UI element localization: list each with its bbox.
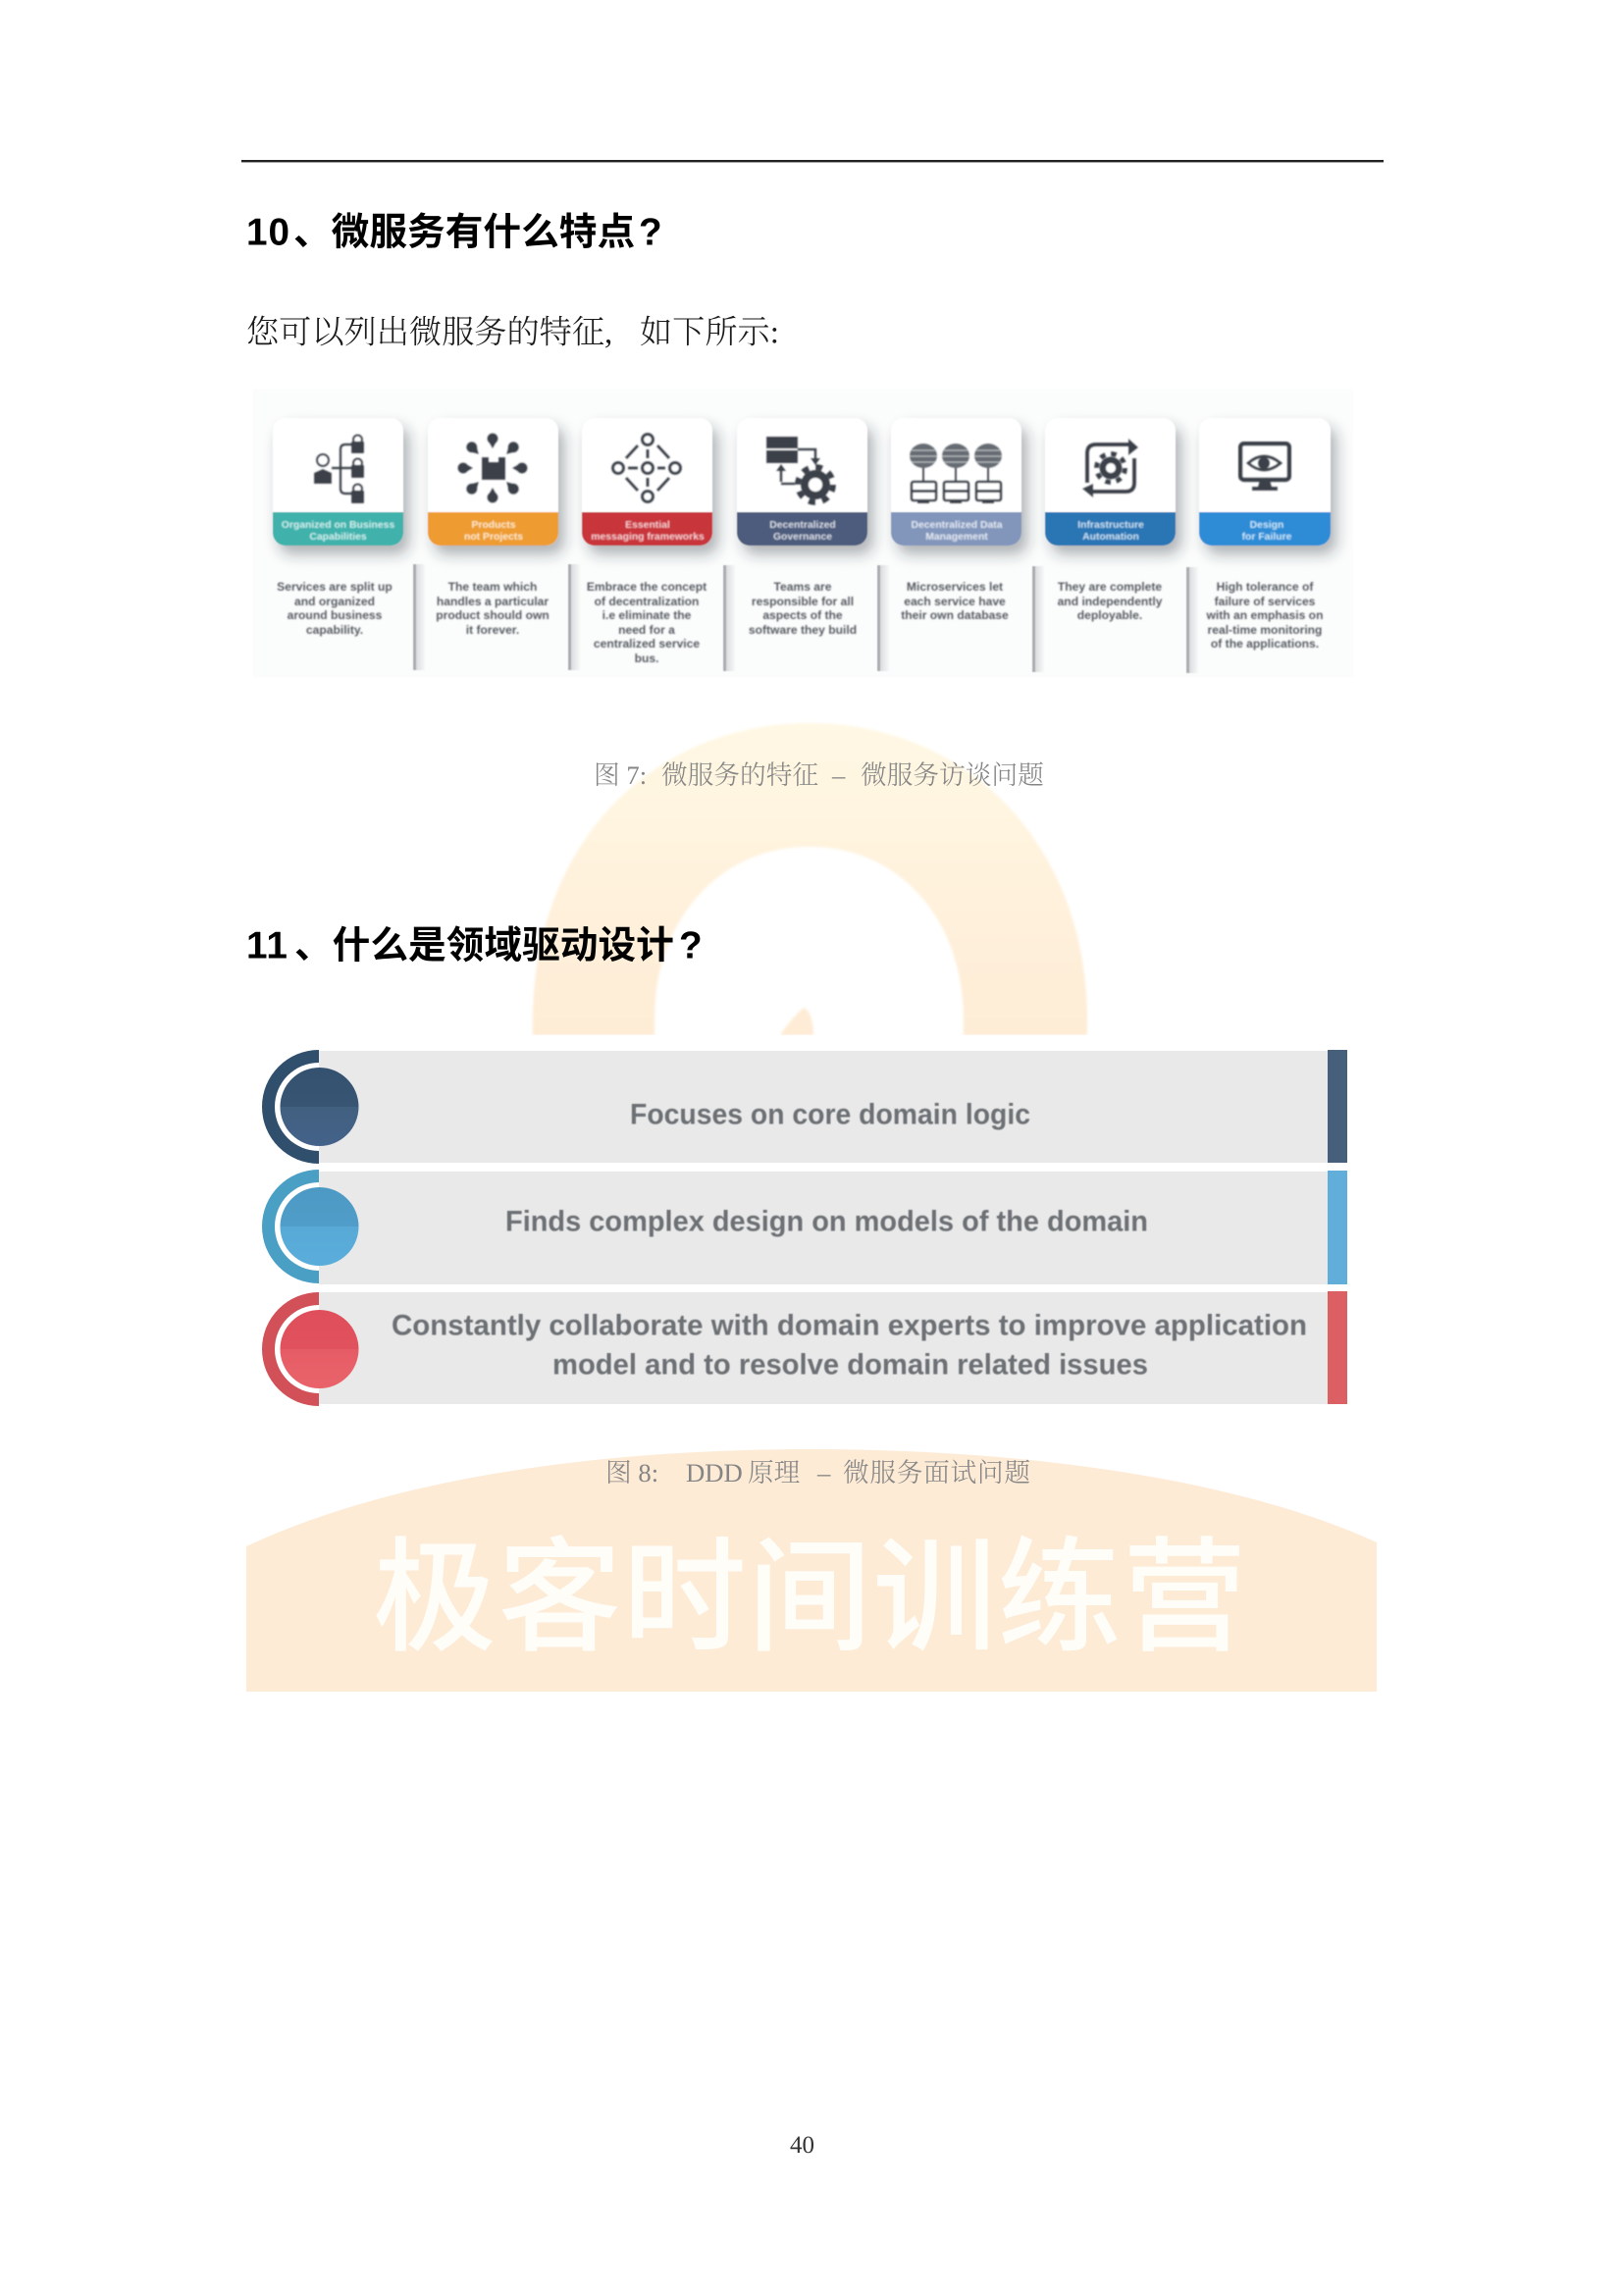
- heading: question 10: 、微服务有什么特点: [293, 212, 635, 253]
- card 5: decentralized data management: each service have: [904, 595, 1006, 608]
- heading: question 10: 10: [246, 212, 290, 253]
- card 3: essential messaging frameworks: need for a: [618, 623, 675, 637]
- caption figure 8: DDD: [686, 1458, 743, 1487]
- card 4: decentralized governance: [737, 418, 867, 637]
- card 1: organized on business capabilities: Organized on Business: [282, 520, 394, 531]
- card 7: design for failure: [1199, 418, 1331, 651]
- row 1: focuses on core domain logic: [262, 1050, 1347, 1164]
- row 1: focuses on core domain logic: Focuses on core domain logic: [630, 1099, 1030, 1130]
- card 6: infrastructure automation: and independently: [1058, 595, 1163, 608]
- card 1: organized on business capabilities: [273, 418, 403, 637]
- card 2: products not projects: [428, 418, 558, 637]
- card 3: essential messaging frameworks: bus.: [635, 652, 658, 665]
- figure 7: microservice characteristics: [253, 390, 1353, 677]
- card 1: organized on business capabilities: Services are split up: [277, 580, 392, 594]
- card 2: products not projects: handles a particular: [437, 595, 549, 608]
- card 4: decentralized governance: Decentralized: [769, 520, 836, 531]
- card 1: organized on business capabilities: and organized: [294, 595, 375, 608]
- card 5: decentralized data management: Management: [925, 532, 988, 543]
- row 3: constantly collaborate: [262, 1291, 1347, 1406]
- row 3: constantly collaborate: Constantly collaborate with domain experts to improve application: [392, 1309, 1307, 1342]
- watermark: flame ring arch: [533, 723, 1087, 1035]
- card 6: infrastructure automation: deployable.: [1077, 608, 1142, 622]
- card 3: essential messaging frameworks: [582, 418, 712, 665]
- heading: question 11: ?: [679, 924, 703, 967]
- card 5: decentralized data management: their own database: [901, 608, 1009, 622]
- card 1: organized on business capabilities: around business: [288, 608, 383, 622]
- card 3: essential messaging frameworks: Essential: [625, 520, 670, 531]
- body text: 您可以列出微服务的特征,: [246, 314, 612, 351]
- card 6: infrastructure automation: They are complete: [1058, 580, 1162, 594]
- card 3: essential messaging frameworks: of decentralization: [595, 595, 699, 608]
- card 2: products not projects: not Projects: [464, 532, 523, 543]
- card 3: essential messaging frameworks: messaging frameworks: [591, 532, 705, 543]
- card 7: design for failure: of the applications.: [1211, 637, 1319, 651]
- caption figure 7: –: [831, 760, 846, 790]
- row 2: finds complex design: [262, 1170, 1347, 1284]
- card 1: organized on business capabilities: capability.: [306, 623, 363, 637]
- row 3: constantly collaborate: model and to resolve domain related issues: [552, 1348, 1148, 1382]
- heading: question 10: ?: [639, 212, 662, 253]
- card 6: infrastructure automation: Automation: [1082, 532, 1139, 543]
- watermark: lower arch with brand text: [246, 1449, 1377, 1692]
- caption figure 7: 图 7:: [594, 760, 647, 790]
- card 7: design for failure: Design: [1250, 520, 1283, 531]
- card 6: infrastructure automation: [1045, 418, 1176, 622]
- card 4: decentralized governance: Governance: [773, 532, 832, 543]
- card 3: essential messaging frameworks: Embrace the concept: [587, 580, 706, 594]
- row 2: finds complex design: Finds complex design on models of the domain: [505, 1205, 1148, 1238]
- card 1: organized on business capabilities: Capabilities: [309, 532, 367, 543]
- card 7: design for failure: real-time monitoring: [1208, 623, 1322, 637]
- top rule: [241, 160, 1384, 162]
- caption figure 7: 微服务访谈问题: [861, 760, 1044, 790]
- caption figure 8: 原理: [748, 1458, 801, 1487]
- card 5: decentralized data management: Microservices let: [907, 580, 1003, 594]
- watermark: lower arch with brand text: 极客时间训练营: [373, 1529, 1246, 1667]
- card 7: design for failure: for Failure: [1242, 532, 1292, 543]
- caption figure 8: 图 8:: [605, 1458, 658, 1487]
- card 5: decentralized data management: Decentralized Data: [912, 520, 1003, 531]
- card 5: decentralized data management: [891, 418, 1021, 622]
- card 2: products not projects: The team which: [448, 580, 537, 594]
- heading: question 11: 、什么是领域驱动设计: [294, 924, 674, 967]
- card 3: essential messaging frameworks: i.e eliminate the: [602, 608, 692, 622]
- figure 8: DDD principles: [235, 1035, 1393, 1428]
- heading: question 11: 11: [246, 924, 288, 967]
- caption figure 8: 微服务面试问题: [843, 1458, 1031, 1487]
- card 3: essential messaging frameworks: centralized service: [594, 637, 700, 651]
- card 4: decentralized governance: software they build: [749, 623, 857, 637]
- card 7: design for failure: High tolerance of: [1217, 580, 1314, 594]
- card 2: products not projects: product should own: [436, 608, 549, 622]
- caption figure 8: –: [816, 1458, 831, 1487]
- page number: 40: [790, 2132, 814, 2159]
- card 2: products not projects: it forever.: [466, 623, 519, 637]
- card 4: decentralized governance: responsible for all: [752, 595, 854, 608]
- card 7: design for failure: failure of services: [1215, 595, 1316, 608]
- card 4: decentralized governance: aspects of the: [762, 608, 843, 622]
- card 6: infrastructure automation: Infrastructure: [1077, 520, 1144, 531]
- card 7: design for failure: with an emphasis on: [1206, 608, 1323, 622]
- card 4: decentralized governance: Teams are: [774, 580, 832, 594]
- card 2: products not projects: Products: [471, 520, 516, 531]
- caption figure 7: 微服务的特征: [661, 760, 818, 790]
- body text: 如下所示:: [640, 314, 779, 351]
